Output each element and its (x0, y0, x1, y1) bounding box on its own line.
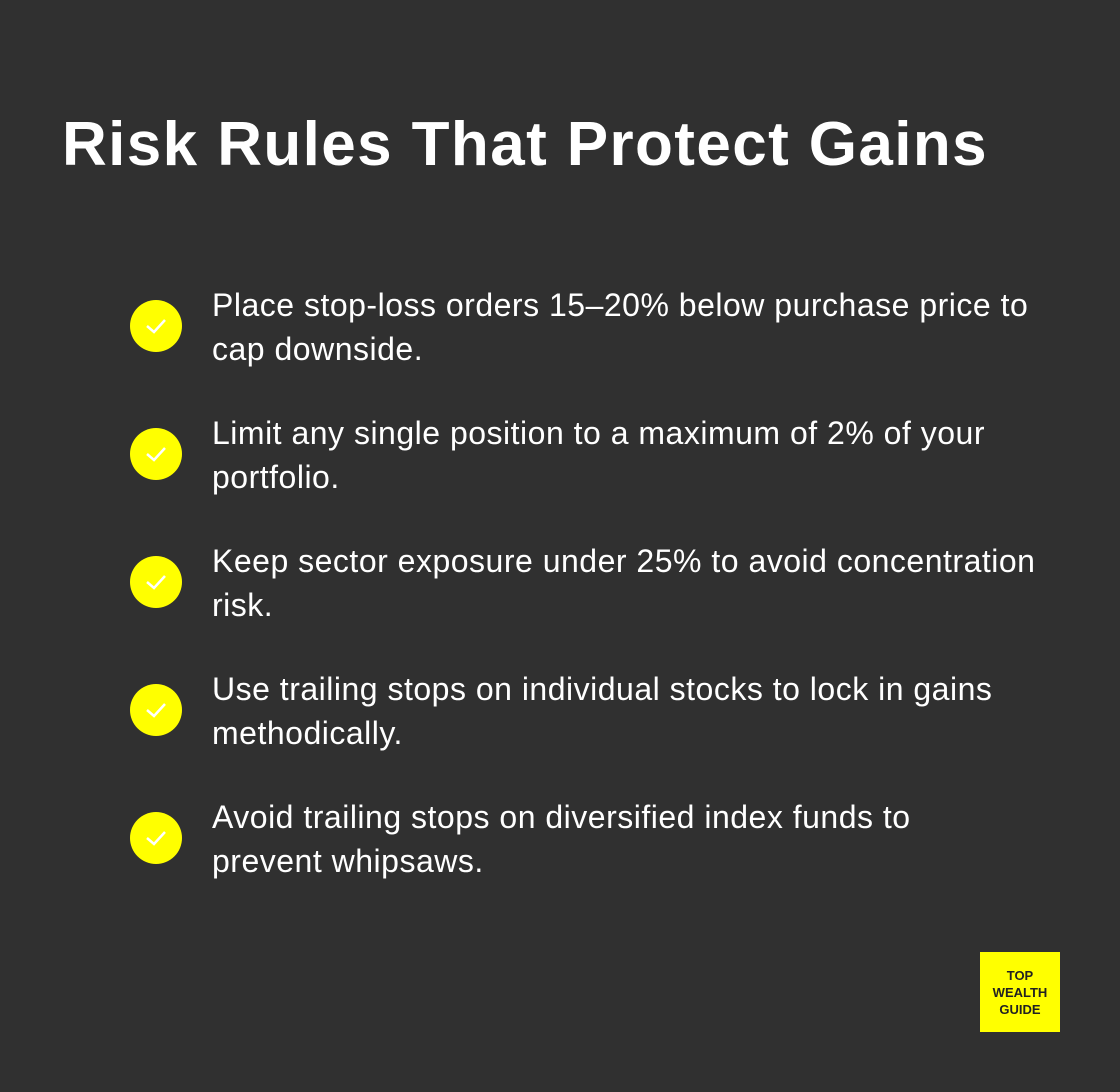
icon: check (130, 300, 182, 352)
logo: TOP (1007, 968, 1033, 982)
text 1: Place stop-loss orders 15–20% below purchase price to (212, 287, 1028, 323)
text 2: portfolio. (212, 459, 340, 495)
item 2 (130, 415, 985, 495)
text 5: prevent whipsaws. (212, 843, 484, 879)
logo: WEALTH (993, 984, 1047, 1000)
text 4 (212, 671, 992, 751)
text 1: cap downside. (212, 331, 423, 367)
text 2 (212, 415, 985, 495)
icon: check (130, 556, 182, 608)
logo (980, 952, 1060, 1032)
text 3 (212, 543, 1035, 623)
item 4 (130, 671, 992, 751)
text 4: Use trailing stops on individual stocks to lock in gains (212, 671, 992, 707)
icon: check (130, 428, 182, 480)
item 3 (130, 543, 1035, 623)
icon: check (130, 812, 182, 864)
text 2: Limit any single position to a maximum of 2% of your (212, 415, 985, 451)
item 5 (130, 799, 911, 879)
icon: check (130, 684, 182, 736)
title: Risk Rules That Protect Gains (62, 110, 988, 179)
text 3: risk. (212, 587, 273, 623)
text 4: methodically. (212, 715, 403, 751)
text 3: Keep sector exposure under 25% to avoid concentration (212, 543, 1035, 579)
text 5 (212, 799, 911, 879)
logo: GUIDE (999, 1002, 1041, 1016)
text 5: Avoid trailing stops on diversified index funds to (212, 799, 911, 835)
text 1 (212, 287, 1028, 367)
item 1 (130, 287, 1028, 367)
